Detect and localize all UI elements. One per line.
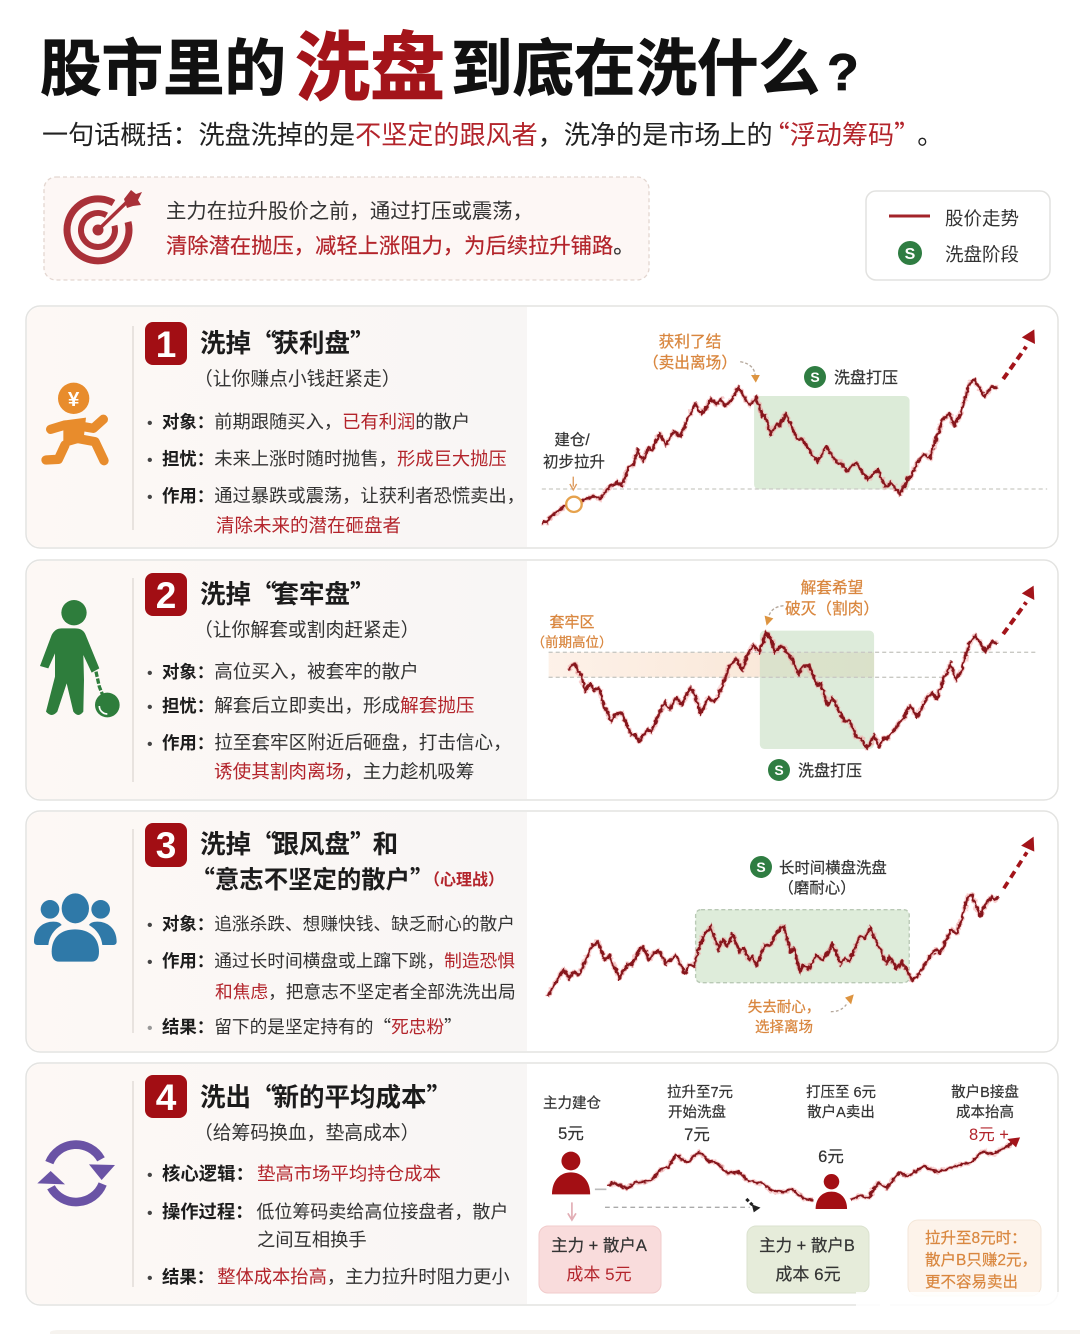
bullets 3: 和焦虑，把意志不坚定者全部洗洗出局 [215, 982, 516, 1002]
heading 2 [194, 574, 419, 640]
bullets 4: 之间互相换手 [257, 1229, 367, 1250]
title [40, 26, 859, 110]
chart 2: 洗盘打压 [798, 761, 862, 780]
heading 2: 洗掉“套牢盘” [200, 574, 376, 611]
icon: cycle arrows [37, 1145, 115, 1202]
callout [44, 177, 649, 280]
bullets 4: • [147, 1167, 153, 1184]
bullets 4: • [147, 1205, 153, 1222]
legend: S [905, 246, 916, 263]
bullets 3 [147, 914, 516, 1039]
cost box A: 主力 + 散户A [551, 1236, 647, 1255]
title: 到底在洗什么 [451, 35, 820, 104]
bullets 3: 结果：留下的是坚定持有的“死忠粉” [162, 1013, 462, 1039]
chart 1: （卖出离场） [643, 354, 737, 372]
note box: 拉升至8元时： [925, 1229, 1027, 1247]
chart 4 [539, 1083, 1041, 1296]
chart 4: 拉升至7元 [667, 1084, 733, 1101]
bullets 1: 作用：通过暴跌或震荡，让获利者恐慌卖出， [162, 485, 525, 506]
chart 3: 失去耐心， [748, 999, 820, 1016]
legend [866, 191, 1050, 280]
badge 3 [145, 823, 187, 867]
icon: people group [34, 893, 117, 962]
chart 4: 主力建仓 [543, 1095, 601, 1112]
chart 4: 7元 [684, 1126, 710, 1144]
panel: 洗掉套牢盘 [26, 560, 1058, 800]
bullets 1: 对象：前期跟随买入，已有利润的散户 [162, 411, 470, 432]
callout text: 清除潜在抛压，减轻上涨阻力，为后续拉升铺路。 [166, 234, 635, 258]
bullets 2: • [147, 736, 153, 753]
badge 4 [145, 1075, 187, 1118]
panel: 洗掉跟风盘 [26, 811, 1058, 1052]
bullets 3: • [147, 954, 153, 971]
chart 4: 打压至 6元 [806, 1084, 876, 1101]
cost box A [539, 1226, 661, 1293]
chart 2: S [774, 762, 784, 778]
title: 洗盘 [295, 26, 445, 110]
bullets 1: 担忧：未来上涨时随时抛售，形成巨大抛压 [162, 448, 507, 469]
chart 4: 散户A卖出 [807, 1104, 875, 1121]
chart 3: 长时间横盘洗盘 [779, 858, 887, 877]
bullets 4: 结果：整体成本抬高，主力拉升时阻力更小 [162, 1266, 510, 1287]
heading 4 [194, 1077, 452, 1143]
chart 3: 选择离场 [755, 1019, 813, 1036]
bullets 1: • [147, 452, 153, 469]
icon: investor 1 [552, 1152, 590, 1194]
badge 3: 3 [156, 825, 176, 866]
cost box B: 成本 6元 [775, 1265, 841, 1284]
bullets 4: • [147, 1270, 153, 1287]
chart 1: 初步拉升 [543, 453, 605, 471]
bullets 3: • [147, 917, 153, 934]
note box: 更不容易卖出 [925, 1273, 1018, 1291]
badge 1: 1 [156, 324, 176, 365]
panel: 洗出新的平均成本 [26, 1063, 1058, 1305]
note box [908, 1220, 1041, 1296]
chart 2: 解套希望 [801, 579, 863, 597]
title: ? [827, 44, 859, 102]
chart 2: 破灭（割肉） [785, 600, 879, 618]
chart 1: 获利了结 [659, 333, 721, 351]
bullets 2: • [147, 665, 153, 682]
bullets 2: 担忧：解套后立即卖出，形成解套抛压 [162, 695, 475, 716]
icon: chained man [40, 600, 120, 717]
chart 2: 套牢区 [549, 614, 595, 631]
subtitle: 一句话概括：洗盘洗掉的是不坚定的跟风者，洗净的是市场上的“浮动筹码”。 [42, 114, 943, 152]
bullets 1: • [147, 415, 153, 432]
heading 1: 洗掉“获利盘” [200, 323, 376, 360]
badge 4: 4 [156, 1077, 177, 1118]
chart 2: （前期高位） [532, 634, 612, 650]
bullets 3: 作用：通过长时间横盘或上蹿下跳，制造恐惧 [162, 951, 515, 971]
cost box B: 主力 + 散户B [759, 1236, 855, 1255]
bullets 2: • [147, 699, 153, 716]
badge 2 [145, 573, 187, 616]
bullets 2: 作用：拉至套牢区附近后砸盘，打击信心， [162, 732, 512, 753]
chart 1: 洗盘打压 [834, 368, 898, 387]
chart 4: 开始洗盘 [668, 1103, 726, 1121]
heading 3 [190, 824, 504, 896]
panel: 洗掉获利盘 [26, 306, 1058, 548]
callout text [166, 200, 635, 258]
bullets 2 [147, 661, 512, 782]
badge 1 [145, 322, 187, 365]
chart 3: （磨耐心） [778, 879, 856, 897]
badge 2: 2 [156, 575, 176, 616]
bullets 4 [147, 1163, 510, 1287]
chart 4: 6元 [818, 1148, 844, 1166]
bullets 2: 对象：高位买入，被套牢的散户 [162, 661, 419, 682]
bullets 4: 核心逻辑：垫高市场平均持仓成本 [162, 1163, 441, 1184]
chart 4: 成本抬高 [956, 1104, 1014, 1121]
chart 4: 8元 + [969, 1126, 1009, 1144]
heading 3: （心理战） [424, 871, 504, 889]
chart 2 [532, 579, 1037, 781]
legend: 洗盘阶段 [945, 244, 1019, 265]
icon: running coin person [46, 383, 104, 461]
cost box A: 成本 5元 [566, 1265, 632, 1284]
legend: 股价走势 [945, 208, 1019, 229]
chart 3 [548, 837, 1034, 1036]
heading 3: 洗掉“跟风盘”和 [200, 824, 398, 861]
chart 4: 散户B接盘 [951, 1083, 1019, 1101]
chart 3: S [756, 859, 766, 875]
heading 1 [194, 323, 401, 389]
chart 1: 建仓/ [554, 431, 590, 449]
chart 1 [542, 329, 1047, 522]
title: 股市里的 [40, 35, 286, 104]
bullets 4: 操作过程：低位筹码卖给高位接盘者，散户 [162, 1201, 508, 1222]
note box: 散户B只赚2元， [925, 1251, 1037, 1269]
heading 4: 洗出“新的平均成本” [200, 1077, 452, 1114]
watermark overlay [856, 1287, 1080, 1322]
callout text: 主力在拉升股价之前，通过打压或震荡， [166, 200, 533, 223]
icon: target [67, 190, 142, 261]
bullets 1: 清除未来的潜在砸盘者 [216, 515, 401, 536]
bullets 3: 对象：追涨杀跌、想赚快钱、缺乏耐心的散户 [162, 914, 515, 934]
bullets 2: 诱使其割肉离场，主力趁机吸筹 [214, 761, 474, 782]
heading 3: “意志不坚定的散户” [190, 861, 434, 896]
icon: investor 2 [816, 1174, 847, 1209]
bullets 1: • [147, 489, 153, 506]
icon: running coin person: ¥ [68, 388, 80, 411]
heading 1: （让你赚点小钱赶紧走） [194, 368, 401, 389]
bullets 1 [147, 411, 525, 536]
cost box B [747, 1226, 869, 1293]
chart 1: S [810, 369, 820, 385]
chart 4: 5元 [558, 1125, 584, 1143]
bullets 3: • [147, 1020, 153, 1037]
next panel top edge [50, 1330, 1080, 1334]
heading 4: （给筹码换血，垫高成本） [194, 1122, 419, 1143]
heading 2: （让你解套或割肉赶紧走） [194, 619, 419, 640]
